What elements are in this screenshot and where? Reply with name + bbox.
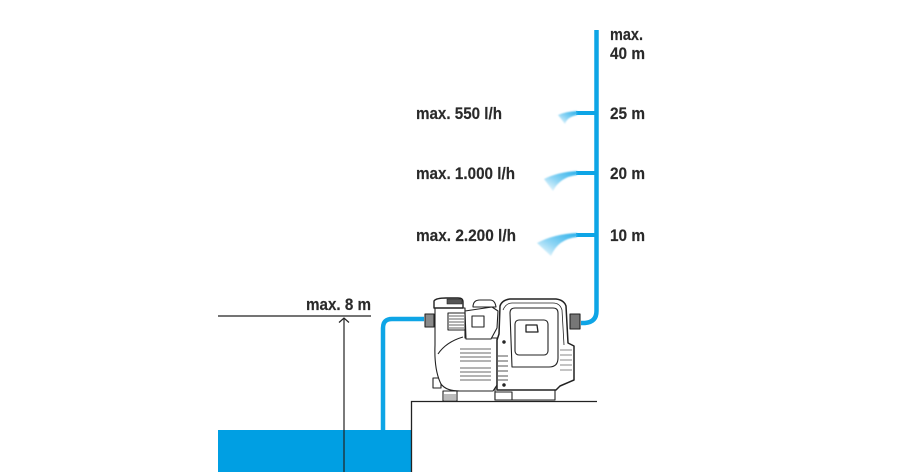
inlet connector <box>425 314 434 327</box>
suction pipe <box>383 319 424 430</box>
water reservoir <box>218 430 411 472</box>
body curve <box>438 337 463 354</box>
flow rate labels <box>416 104 516 245</box>
filter cap <box>434 298 463 308</box>
flow rate labels: max. 550 l/h <box>416 104 502 123</box>
height labels <box>610 25 645 245</box>
pump ribs <box>460 349 491 380</box>
screws <box>503 341 505 343</box>
outlet 20 m <box>544 171 596 191</box>
ribbed collar <box>448 313 465 330</box>
delivery pipe <box>581 30 596 323</box>
outlet connector <box>570 314 580 329</box>
control dome <box>473 300 496 307</box>
pump body <box>435 308 497 391</box>
control housing <box>465 307 498 339</box>
outlet 10 m <box>537 233 596 256</box>
display frame <box>515 320 548 355</box>
label: suction height: max. 8 m <box>306 295 371 314</box>
height labels: 20 m <box>610 164 645 183</box>
height labels: 25 m <box>610 104 645 123</box>
motor panel <box>510 308 558 367</box>
pump <box>425 298 580 401</box>
indicator window <box>472 316 484 327</box>
height labels: max. <box>610 25 643 44</box>
flow rate labels: max. 1.000 l/h <box>416 164 515 183</box>
outlet 25 m <box>558 111 596 124</box>
ground ledge <box>412 402 597 472</box>
height labels: 40 m <box>610 44 645 63</box>
drain plug <box>433 378 441 388</box>
arrow: suction height <box>339 318 349 472</box>
height labels: 10 m <box>610 226 645 245</box>
right vents <box>560 350 572 370</box>
left vents <box>498 356 508 380</box>
base <box>495 388 555 400</box>
display icon <box>526 325 538 332</box>
suction height line <box>218 315 371 317</box>
motor housing <box>497 299 574 390</box>
flow rate labels: max. 2.200 l/h <box>416 226 516 245</box>
motor inner outline <box>503 303 564 345</box>
pump foot <box>443 391 457 401</box>
